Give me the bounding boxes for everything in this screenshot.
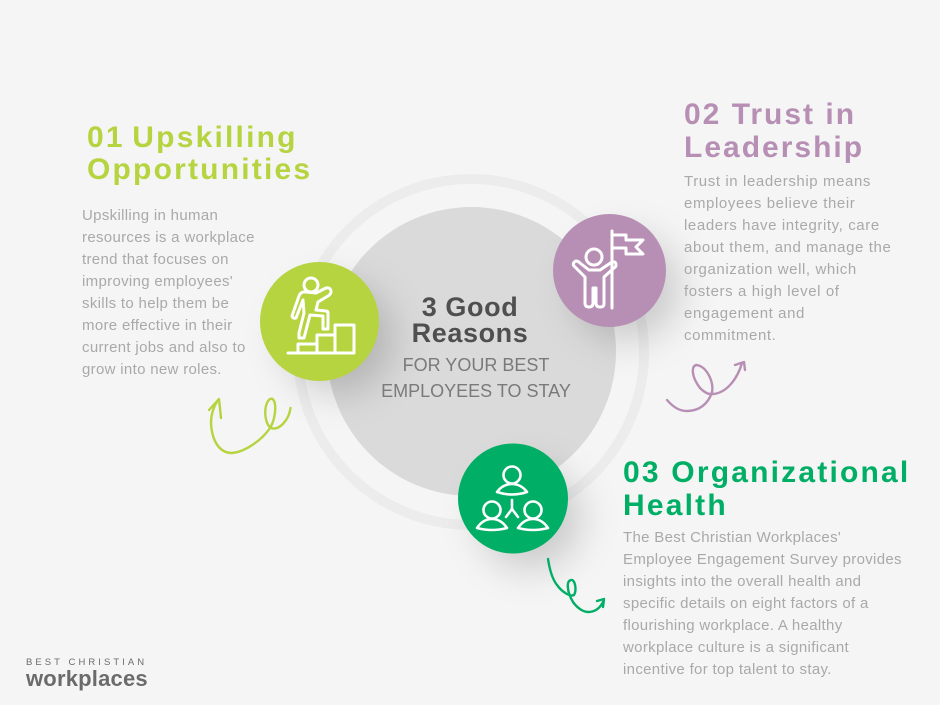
heading: 02 Trust in Leadership bbox=[684, 98, 864, 164]
badge: upskilling bbox=[260, 262, 379, 381]
heading: 01 Upskilling Opportunities: 01 Upskilling bbox=[87, 121, 298, 154]
outer ring bbox=[298, 179, 644, 525]
text: health description: The Best Christian Workplaces' bbox=[623, 529, 841, 546]
heading: 01 Upskilling Opportunities bbox=[87, 121, 312, 186]
text: trust description: fosters a high level of bbox=[684, 283, 840, 300]
icon: person with flag bbox=[573, 231, 643, 308]
logo: Best Christian Workplaces: workplaces bbox=[26, 666, 148, 691]
text: upskilling description: Upskilling in human bbox=[82, 207, 218, 224]
text: trust description bbox=[684, 173, 891, 344]
text: health description: flourishing workplace. A healthy bbox=[623, 617, 843, 634]
text: health description: insights into the overall health and bbox=[623, 573, 861, 590]
badge: trust in leadership bbox=[553, 214, 666, 327]
text: upskilling description: trend that focuses on bbox=[82, 251, 229, 268]
text: upskilling description: improving employees' bbox=[82, 273, 233, 290]
arrow: purple loop bbox=[667, 362, 745, 411]
text: trust description: employees believe their bbox=[684, 195, 855, 212]
heading: 02 Trust in Leadership: 02 Trust in bbox=[684, 98, 856, 131]
arrow: dark green loop bbox=[548, 559, 604, 612]
logo: Best Christian Workplaces: BEST CHRISTIAN bbox=[26, 657, 147, 668]
heading: 02 Trust in Leadership: Leadership bbox=[684, 131, 864, 164]
text: trust description: about them, and manage the bbox=[684, 239, 891, 256]
text: upskilling description bbox=[82, 207, 255, 378]
centre title bbox=[412, 292, 528, 348]
heading: 03 Organizational Health: 03 Organizational bbox=[623, 456, 910, 489]
icon: three connected people bbox=[477, 466, 548, 530]
text: trust description: Trust in leadership means bbox=[684, 173, 871, 190]
centre subtitle bbox=[381, 355, 571, 401]
badge: organizational health bbox=[458, 444, 568, 554]
centre subtitle: EMPLOYEES TO STAY bbox=[381, 381, 571, 401]
text: upskilling description: more effective in their bbox=[82, 317, 232, 334]
text: trust description: commitment. bbox=[684, 327, 776, 344]
centre subtitle: FOR YOUR BEST bbox=[403, 355, 549, 375]
text: health description: Employee Engagement Survey provides bbox=[623, 551, 902, 568]
central grey disc bbox=[327, 207, 616, 496]
heading: 03 Organizational Health bbox=[623, 456, 910, 522]
heading: 03 Organizational Health: Health bbox=[623, 489, 728, 522]
text: trust description: organization well, which bbox=[684, 261, 857, 278]
text: health description bbox=[623, 529, 902, 678]
text: upskilling description: grow into new roles. bbox=[82, 361, 222, 378]
centre title: Reasons bbox=[412, 318, 528, 348]
centre title: 3 Good bbox=[422, 292, 518, 322]
text: health description: workplace culture is a significant bbox=[623, 639, 849, 656]
heading: 01 Upskilling Opportunities: Opportunities bbox=[87, 153, 312, 186]
text: upskilling description: skills to help them be bbox=[82, 295, 229, 312]
text: health description: incentive for top talent to stay. bbox=[623, 661, 832, 678]
arrow: lime loop bbox=[209, 399, 290, 453]
text: trust description: engagement and bbox=[684, 305, 805, 322]
text: upskilling description: resources is a workplace bbox=[82, 229, 255, 246]
text: trust description: leaders have integrity, care bbox=[684, 217, 880, 234]
text: health description: specific details on eight factors of a bbox=[623, 595, 869, 612]
text: upskilling description: current jobs and also to bbox=[82, 339, 246, 356]
circle shadows bbox=[282, 234, 680, 570]
icon: person climbing steps bbox=[288, 278, 354, 353]
